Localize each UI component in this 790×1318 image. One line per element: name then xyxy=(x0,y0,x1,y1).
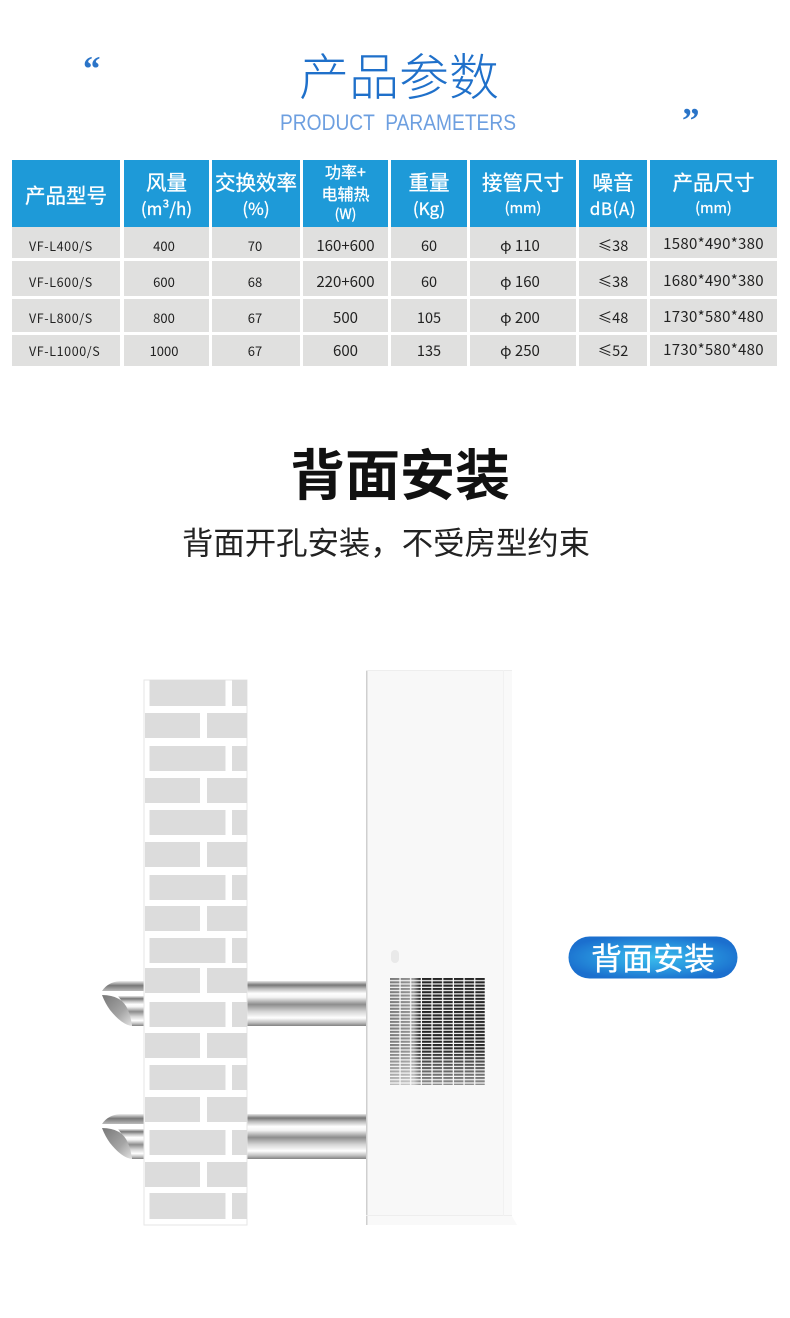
table row: VF-L600/S: 600 xyxy=(153,272,175,290)
table row: VF-L600/S xyxy=(12,261,777,296)
table header: 功率+电辅热: (W) xyxy=(335,204,356,224)
quote mark: right: ” xyxy=(682,101,700,140)
table header: 交换效率: (%) xyxy=(242,195,270,220)
lower pipe xyxy=(102,1114,366,1159)
table row: VF-L800/S xyxy=(12,299,777,332)
table row: VF-L1000/S: 1000 xyxy=(150,341,178,360)
table row: VF-L1000/S: ≤52 xyxy=(598,340,628,361)
table row: VF-L600/S: VF-L600/S xyxy=(29,272,93,290)
table row: VF-L800/S: 67 xyxy=(248,308,262,326)
brick wall xyxy=(144,680,247,1225)
table header: 接管尺寸: (mm) xyxy=(505,197,541,218)
upper pipe xyxy=(102,981,366,1026)
table header: 噪音: dB(A) xyxy=(590,195,636,220)
table header: 重量: 重量 xyxy=(408,166,450,196)
ventilation grille xyxy=(390,978,485,1085)
table row: VF-L400/S: 160+600 xyxy=(316,235,375,256)
table header: 产品尺寸 xyxy=(650,160,777,227)
table header: 重量 xyxy=(391,160,467,227)
table row: VF-L600/S: 60 xyxy=(421,270,437,292)
table row: VF-L800/S: 1730*580*480 xyxy=(663,306,764,326)
table header: 产品尺寸: (mm) xyxy=(695,197,732,218)
table row: VF-L600/S: 1680*490*380 xyxy=(663,270,764,290)
table row: VF-L1000/S xyxy=(12,335,777,366)
title: 产品参数: 产品参数 xyxy=(299,38,499,110)
table row: VF-L400/S: 1580*490*380 xyxy=(663,232,764,254)
quote mark: left: “ xyxy=(83,49,100,88)
table header: 重量: (Kg) xyxy=(413,195,445,220)
table header: 接管尺寸 xyxy=(470,160,576,227)
table header: 风量 xyxy=(124,160,209,227)
table row: VF-L1000/S: 67 xyxy=(248,341,262,360)
table header: 功率+电辅热: 功率+ xyxy=(325,159,366,183)
table header: 功率+电辅热: 电辅热 xyxy=(321,181,370,205)
table row: VF-L600/S: φ 160 xyxy=(500,270,540,292)
table row: VF-L1000/S: 600 xyxy=(333,340,358,361)
subheading text: 背面开孔安装，不受房型约束 xyxy=(182,519,590,564)
table row: VF-L800/S: 800 xyxy=(153,308,175,326)
heading: 背面安装: 背面安装 xyxy=(290,431,510,511)
table header: 产品尺寸: 产品尺寸 xyxy=(672,166,754,196)
table row: VF-L800/S: 500 xyxy=(333,306,358,328)
table header: 交换效率: 交换效率 xyxy=(215,166,297,196)
table row: VF-L400/S: ≤38 xyxy=(598,235,628,256)
table row: VF-L800/S: ≤48 xyxy=(598,306,628,328)
table row: VF-L800/S: φ 200 xyxy=(500,306,540,328)
indicator light xyxy=(391,950,399,963)
label pill: 背面安装: 背面安装 xyxy=(591,934,715,979)
table row: VF-L400/S: VF-L400/S xyxy=(29,236,93,255)
table row: VF-L600/S: 68 xyxy=(248,272,262,290)
table row: VF-L1000/S: φ 250 xyxy=(500,340,540,361)
table row: VF-L800/S: VF-L800/S xyxy=(29,308,93,326)
table header: 功率+电辅热 xyxy=(303,160,388,227)
table row: VF-L400/S: 400 xyxy=(153,236,175,255)
table header: 接管尺寸: 接管尺寸 xyxy=(482,166,564,196)
parameter table xyxy=(12,159,777,366)
table header: 噪音 xyxy=(579,160,647,227)
table header: 噪音: 噪音 xyxy=(592,166,634,196)
table header: 风量: 风量 xyxy=(146,166,187,196)
table row: VF-L400/S: φ 110 xyxy=(500,235,540,256)
table row: VF-L1000/S: 1730*580*480 xyxy=(663,338,764,360)
table header: 交换效率 xyxy=(212,160,300,227)
table row: VF-L1000/S: 135 xyxy=(417,340,441,361)
cabinet unit xyxy=(366,670,517,1225)
table row: VF-L600/S: 220+600 xyxy=(316,270,375,292)
table row: VF-L1000/S: VF-L1000/S xyxy=(29,341,100,360)
table header: 产品型号: 产品型号 xyxy=(25,178,107,208)
table row: VF-L400/S: 70 xyxy=(248,236,262,255)
table row: VF-L400/S: 60 xyxy=(421,235,437,256)
table header: 产品型号 xyxy=(12,160,120,227)
table header: 风量: (m³/h) xyxy=(141,195,192,220)
table row: VF-L800/S: 105 xyxy=(417,306,441,328)
table row: VF-L600/S: ≤38 xyxy=(598,270,628,292)
table row: VF-L400/S xyxy=(12,227,777,258)
